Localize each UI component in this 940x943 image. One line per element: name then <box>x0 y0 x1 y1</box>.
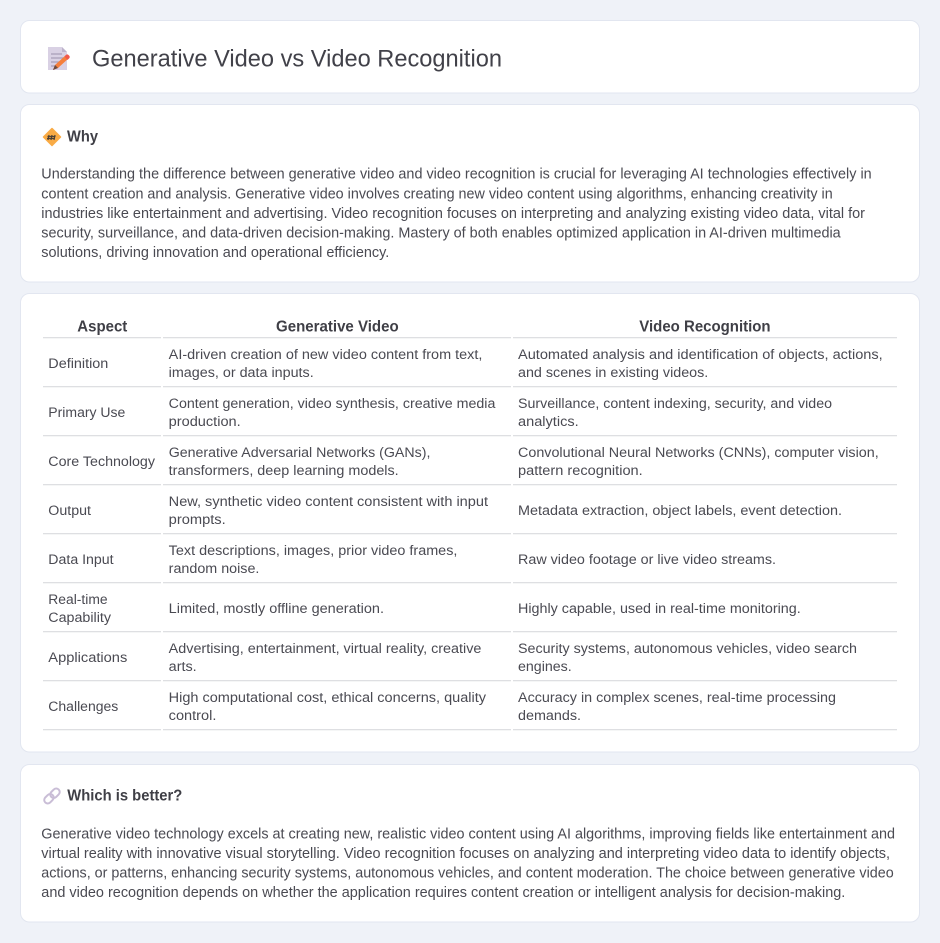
table row: real-time capability <box>48 592 801 626</box>
table row: output: Metadata extraction, object labels, event detection. <box>518 503 842 519</box>
table row: definition <box>48 347 883 381</box>
text block: why paragraph <box>41 167 872 261</box>
table row: challenges: Challenges <box>48 699 118 715</box>
table row: primary use <box>48 396 832 430</box>
heading: why: Why <box>67 129 98 146</box>
table row: primary use: Surveillance, content indexing, security, and video <box>518 396 832 412</box>
table row: definition: AI-driven creation of new video content from text, <box>169 347 482 363</box>
table row: definition: images, or data inputs. <box>169 365 314 381</box>
table row: real-time capability: Highly capable, used in real-time monitoring. <box>518 601 801 617</box>
table row: definition: Automated analysis and identification of objects, actions, <box>518 347 883 363</box>
text block: which is better paragraph: and video recognition depends on whether the application requires content creation or intelligent analysis for decision-making. <box>41 885 845 901</box>
table row: definition: and scenes in existing videos. <box>518 365 708 381</box>
table row: data input: Data Input <box>48 552 114 568</box>
table header row: Video Recognition <box>639 319 771 336</box>
table row: applications: engines. <box>518 659 572 675</box>
text block: which is better paragraph: Generative video technology excels at creating new, realistic video content using AI algorithms, improving fields like entertainment and <box>41 826 895 842</box>
heading: which is better: Which is better? <box>67 788 182 805</box>
table row: challenges: Accuracy in complex scenes, real-time processing <box>518 690 836 706</box>
table header row: Aspect <box>77 319 127 336</box>
table row: output <box>48 494 842 528</box>
table row: output: prompts. <box>169 512 226 528</box>
table row: output: Output <box>48 503 91 519</box>
table row: primary use: production. <box>169 414 241 430</box>
text block: why paragraph: content creation and analysis. Generative video involves creating new video content using algorithms, enhancing creativity in <box>41 186 833 202</box>
table row: applications <box>48 641 857 675</box>
table row: core technology: Generative Adversarial Networks (GANs), <box>169 445 430 461</box>
table row: data input <box>48 543 776 577</box>
table row: real-time capability: Limited, mostly offline generation. <box>169 601 384 617</box>
panel: comparison table <box>20 294 920 752</box>
table row: challenges <box>48 690 836 724</box>
table header row: Generative Video <box>276 319 399 336</box>
title: Generative Video vs Video Recognition <box>92 46 502 73</box>
table row: data input: Raw video footage or live video streams. <box>518 552 776 568</box>
table row: primary use: analytics. <box>518 414 579 430</box>
table row: core technology: Convolutional Neural Networks (CNNs), computer vision, <box>518 445 879 461</box>
table row: definition: Definition <box>48 356 108 372</box>
table row: applications: Security systems, autonomous vehicles, video search <box>518 641 857 657</box>
icon: orange diamond sign <box>44 128 60 146</box>
table row: challenges: High computational cost, ethical concerns, quality <box>169 690 487 706</box>
table row: primary use: Content generation, video synthesis, creative media <box>169 396 496 412</box>
text block: which is better paragraph: virtual reality with innovative visual storytelling. Video recognition focuses on analyzing and interpreting video data to identify objects, <box>41 846 890 862</box>
table row: output: New, synthetic video content consistent with input <box>169 494 488 510</box>
table row: core technology: transformers, deep learning models. <box>169 463 399 479</box>
panel: title header <box>20 20 920 93</box>
text block: which is better paragraph <box>41 826 895 901</box>
table row: core technology: pattern recognition. <box>518 463 643 479</box>
text block: why paragraph: industries like entertainment and advertising. Video recognition focuses on interpreting and analyzing existing video data, vital for <box>41 206 865 222</box>
text block: which is better paragraph: actions, or patterns, enhancing security systems, autonomous vehicles, and content moderation. The choice between generative video <box>41 866 894 882</box>
icon: chain link <box>43 787 61 805</box>
table row: data input: Text descriptions, images, prior video frames, <box>169 543 457 559</box>
table row: primary use: Primary Use <box>48 405 125 421</box>
text block: why paragraph: security, surveillance, and data-driven decision-making. Mastery of both enables optimized application in AI-driven multimedia <box>41 226 841 242</box>
table row: applications: arts. <box>169 659 197 675</box>
table row: challenges: demands. <box>518 708 581 724</box>
panel: why <box>20 104 920 282</box>
icon: document with pencil <box>48 47 70 70</box>
table row: applications: Advertising, entertainment, virtual reality, creative <box>169 641 482 657</box>
table header row <box>77 319 771 336</box>
table row: real-time capability: Capability <box>48 610 112 626</box>
table row: applications: Applications <box>48 650 127 666</box>
text block: why paragraph: Understanding the difference between generative video and video recognition is crucial for leveraging AI technologies effectively in <box>41 167 872 183</box>
table row: core technology: Core Technology <box>48 454 156 470</box>
table row: real-time capability: Real-time <box>48 592 108 608</box>
text block: why paragraph: solutions, driving innovation and operational efficiency. <box>41 245 389 261</box>
panel: which is better <box>20 764 920 922</box>
table row: challenges: control. <box>169 708 216 724</box>
table row: data input: random noise. <box>169 561 259 577</box>
table row: core technology <box>48 445 879 479</box>
